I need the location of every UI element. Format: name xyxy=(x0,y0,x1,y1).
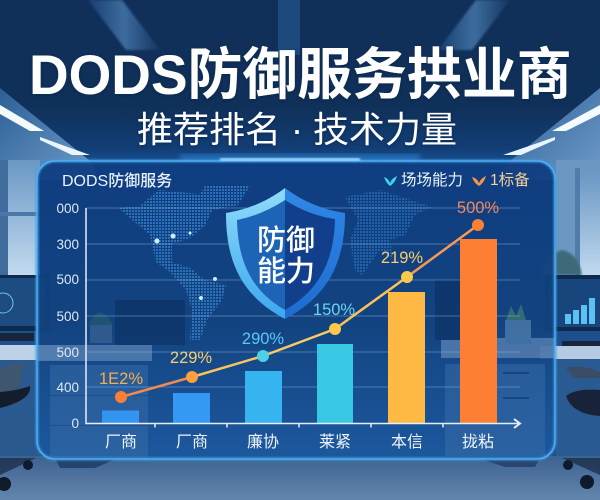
value labels: 1E2% xyxy=(99,370,143,388)
value labels: 219% xyxy=(381,249,423,267)
legend: 1标备 xyxy=(490,171,530,189)
trend points xyxy=(115,219,484,403)
x axis labels: 拢粘 xyxy=(462,433,494,451)
gridlines xyxy=(86,208,520,387)
left monitor xyxy=(0,275,50,331)
trend line xyxy=(121,225,478,397)
legend xyxy=(384,171,530,189)
shield icon xyxy=(226,188,345,319)
shield label: 防御 xyxy=(257,224,315,257)
chart title: DODS防御服务 xyxy=(62,172,172,190)
y axis labels: 000 xyxy=(56,201,79,216)
world map xyxy=(118,186,432,340)
right monitor xyxy=(545,275,600,331)
y axis labels: 500 xyxy=(56,345,79,360)
subtitle: 推荐排名 · 技术力量 xyxy=(137,109,457,150)
bars xyxy=(102,239,497,424)
x axis labels: 莱紧 xyxy=(319,433,351,451)
value labels xyxy=(99,199,499,388)
y axis labels xyxy=(56,201,79,431)
y axis labels: 500 xyxy=(56,272,79,287)
x axis labels: 廉协 xyxy=(247,433,279,451)
x axis labels: 本信 xyxy=(391,433,423,451)
x axis labels: 厂商 xyxy=(105,433,137,451)
axes xyxy=(86,208,520,428)
value labels: 229% xyxy=(170,349,212,367)
glass card border xyxy=(37,158,555,459)
legend: 场场能力 xyxy=(401,171,463,189)
shield label second line: 能力 xyxy=(257,255,315,288)
x axis labels: 厂商 xyxy=(176,433,208,451)
value labels: 500% xyxy=(457,199,499,217)
x axis labels xyxy=(105,433,494,451)
map glow points xyxy=(154,232,217,300)
y axis labels: 500 xyxy=(56,309,79,324)
y axis labels: 0 xyxy=(71,416,79,431)
y axis labels: 300 xyxy=(56,237,79,252)
value labels: 150% xyxy=(313,301,355,319)
value labels: 290% xyxy=(242,330,284,348)
y axis labels: 400 xyxy=(56,380,79,395)
title: DODS防御服务拱业商 xyxy=(29,43,572,106)
panel: chart glass card xyxy=(37,161,555,459)
